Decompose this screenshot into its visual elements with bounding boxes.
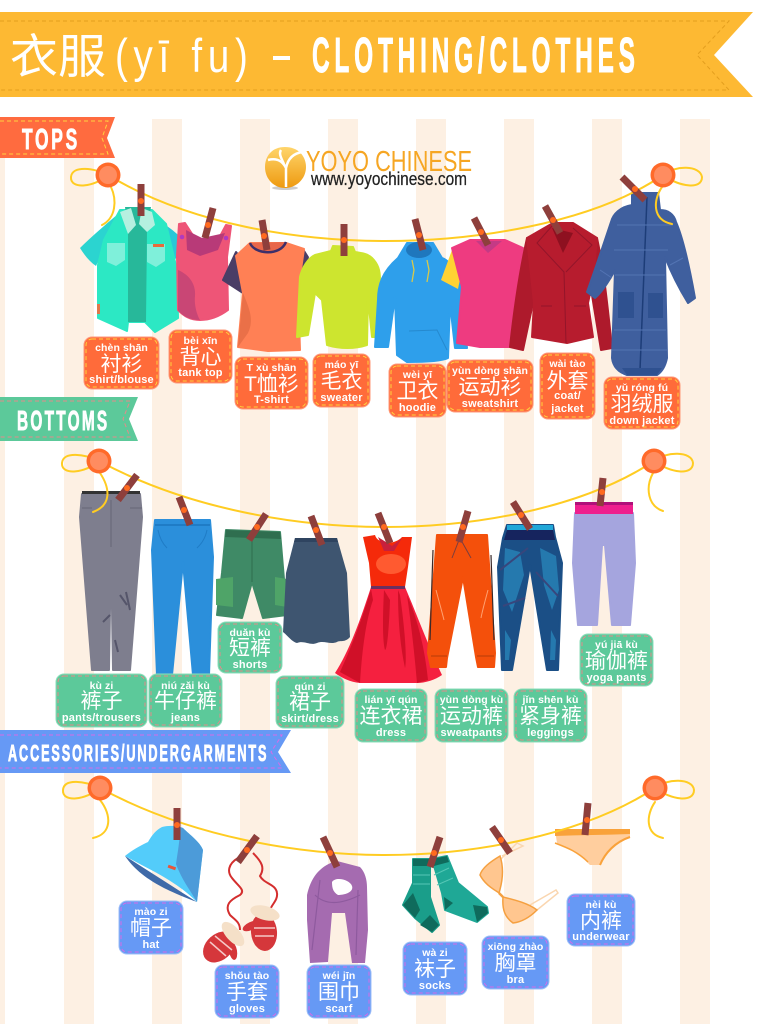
label: gloves: gloves	[229, 1003, 265, 1015]
title text: (yī fu)	[115, 30, 248, 83]
label: yoga pants	[580, 634, 653, 686]
label: scarf: wéi jīn	[322, 970, 355, 982]
label: coat/jacket: 外套	[546, 370, 588, 393]
label: bra: xiōng zhào	[488, 941, 543, 953]
section heading: TOPS	[0, 117, 115, 158]
label: hat	[119, 901, 183, 954]
label: yoga pants: 瑜伽裤	[585, 650, 648, 673]
accessory: hat	[125, 826, 203, 902]
label: socks: 袜子	[414, 958, 456, 981]
panel: bottoms clothesline	[56, 448, 693, 742]
label: scarf	[307, 965, 371, 1018]
garment: hoodie	[375, 242, 467, 362]
label: sweatshirt: 运动衫	[458, 376, 522, 399]
label: skirt/dress: 裙子	[289, 691, 331, 714]
label: down jacket	[604, 377, 680, 429]
label: socks: wà zi	[421, 947, 448, 959]
label: jeans: niú zǎi kù	[161, 680, 210, 692]
label: sweater: sweater	[320, 392, 363, 404]
section heading: TOPS: TOPS	[22, 124, 77, 156]
label: shirt/blouse: chèn shān	[95, 342, 148, 354]
garment: sweater	[297, 246, 380, 348]
label: bra: bra	[507, 974, 525, 986]
garment: coat	[510, 223, 612, 350]
label: bra	[482, 936, 549, 989]
panel: accessories clothesline	[63, 776, 694, 1018]
section heading: ACCESSORIES/UNDERGARMENTS: ACCESSORIES/UNDERGARMENTS	[8, 740, 267, 766]
garment: T-shirt	[223, 242, 309, 351]
label: jeans: jeans	[170, 712, 200, 724]
label: pants/trousers	[56, 674, 147, 727]
label: scarf: 围巾	[318, 981, 360, 1004]
label: T-shirt: T恤衫	[244, 373, 299, 396]
label: skirt/dress	[276, 676, 344, 728]
label: underwear	[567, 894, 635, 946]
label: shirt/blouse: 衬衫	[100, 353, 142, 376]
title text: 衣服	[10, 18, 106, 87]
garment: tank top	[177, 223, 231, 320]
label: T-shirt: T xù shān	[247, 362, 296, 374]
label: scarf: scarf	[325, 1003, 353, 1015]
label: underwear: nèi kù	[586, 899, 616, 911]
label: bra: 胸罩	[494, 952, 536, 975]
label: tank top	[169, 330, 232, 383]
label: yoga pants: yoga pants	[586, 672, 647, 684]
accessory: scarf	[307, 861, 368, 963]
label: shirt/blouse: shirt/blouse	[89, 374, 154, 386]
label: coat/jacket: coat/	[554, 390, 581, 402]
garment: dress	[335, 535, 442, 683]
garment: sweatshirt	[441, 240, 523, 347]
panel: tops clothesline	[71, 162, 702, 429]
label: skirt/dress: skirt/dress	[281, 713, 339, 725]
logo: Yoyo Chinese: www.yoyochinese.com	[310, 169, 467, 189]
label: hat: 帽子	[130, 917, 172, 940]
label: down jacket: yǔ róng fú	[616, 382, 668, 394]
section heading: BOTTOMS	[0, 397, 138, 441]
label: sweater: 毛衣	[320, 370, 362, 393]
label: socks	[403, 942, 467, 995]
label: shorts: 短裤	[229, 637, 271, 660]
label: shirt/blouse	[84, 337, 159, 389]
label: gloves	[215, 965, 279, 1018]
clothes pins: accessories	[174, 803, 590, 867]
label: socks: socks	[419, 980, 451, 992]
label: hat: hat	[142, 939, 160, 951]
accessory: socks	[403, 856, 488, 932]
label: dress: 连衣裙	[360, 705, 422, 728]
accessory: gloves	[197, 853, 281, 969]
label: gloves: 手套	[226, 981, 268, 1004]
label: dress: lián yī qún	[364, 694, 418, 706]
label: skirt/dress: qún zi	[295, 681, 325, 693]
label: hoodie: 卫衣	[396, 380, 438, 403]
label: leggings: 紧身裤	[519, 705, 582, 728]
label: sweatshirt: sweatshirt	[462, 398, 518, 410]
label: tank top: tank top	[178, 367, 223, 379]
label: gloves: shǒu tào	[225, 970, 269, 982]
title banner	[0, 12, 753, 97]
label: jeans	[149, 674, 222, 727]
label: coat/jacket: jacket	[550, 403, 584, 415]
label: coat/jacket	[540, 353, 595, 419]
label: shorts: shorts	[233, 659, 267, 671]
label: sweatpants: yùn dòng kù	[440, 694, 503, 706]
clothesline rope: bottoms	[62, 448, 693, 527]
garment: pants	[80, 491, 142, 670]
label: hat: mào zi	[134, 906, 168, 918]
label: sweater	[313, 354, 370, 407]
label: T-shirt: T-shirt	[254, 394, 289, 406]
label: sweatpants	[435, 689, 508, 742]
label: jeans: 牛仔裤	[154, 690, 217, 713]
label: down jacket: 羽绒服	[610, 393, 674, 416]
label: coat/jacket: wài tào	[548, 358, 586, 370]
garment: jeans	[152, 520, 213, 675]
label: leggings: leggings	[527, 727, 574, 739]
clothesline rope: tops	[71, 162, 702, 241]
accessory: underwear	[555, 829, 630, 865]
garment: skirt	[283, 538, 350, 644]
label: underwear: 内裤	[580, 910, 622, 933]
label: leggings	[514, 689, 587, 742]
section heading: ACCESSORIES/UNDERGARMENTS	[0, 730, 291, 773]
label: pants/trousers: pants/trousers	[62, 712, 141, 724]
label: yoga pants: yú jiā kù	[595, 639, 638, 651]
label: T-shirt	[235, 357, 308, 409]
label: leggings: jǐn shēn kù	[522, 694, 578, 706]
label: sweatpants: 运动裤	[440, 705, 503, 728]
title text	[10, 18, 635, 87]
label: pants/trousers: 裤子	[80, 690, 122, 713]
label: underwear: underwear	[572, 931, 630, 943]
label: pants/trousers: kù zi	[90, 680, 113, 692]
garment: sweatpants	[428, 535, 495, 667]
label: shorts: duǎn kù	[230, 627, 270, 639]
clothesline rope: accessories	[63, 776, 694, 855]
garment: shirt	[80, 207, 190, 332]
garment: shorts	[216, 530, 287, 618]
label: hoodie: hoodie	[399, 402, 436, 414]
label: sweatpants: sweatpants	[441, 727, 502, 739]
label: hoodie	[389, 364, 446, 417]
accessory: bra	[480, 843, 558, 923]
label: shorts	[218, 622, 282, 673]
label: down jacket: down jacket	[609, 415, 675, 427]
logo: Yoyo Chinese	[265, 146, 472, 190]
label: dress	[355, 689, 427, 742]
label: hoodie: wèi yī	[402, 369, 433, 381]
label: sweatshirt	[447, 360, 533, 412]
title text: CLOTHING/CLOTHES	[312, 29, 635, 83]
label: tank top: bèi xīn	[184, 335, 217, 347]
garment: yoga pants	[573, 502, 635, 625]
garment: down jacket	[587, 193, 695, 375]
label: sweater: máo yī	[325, 359, 359, 371]
logo: Yoyo Chinese: YOYO CHINESE	[306, 146, 472, 178]
label: sweatshirt: yùn dòng shān	[452, 365, 528, 377]
garment: leggings	[498, 525, 562, 670]
section heading: BOTTOMS: BOTTOMS	[17, 405, 107, 436]
clothes pins: tops	[138, 177, 645, 256]
label: tank top: 背心	[180, 346, 222, 369]
label: dress: dress	[376, 727, 406, 739]
clothes pins: bottoms	[118, 475, 605, 545]
